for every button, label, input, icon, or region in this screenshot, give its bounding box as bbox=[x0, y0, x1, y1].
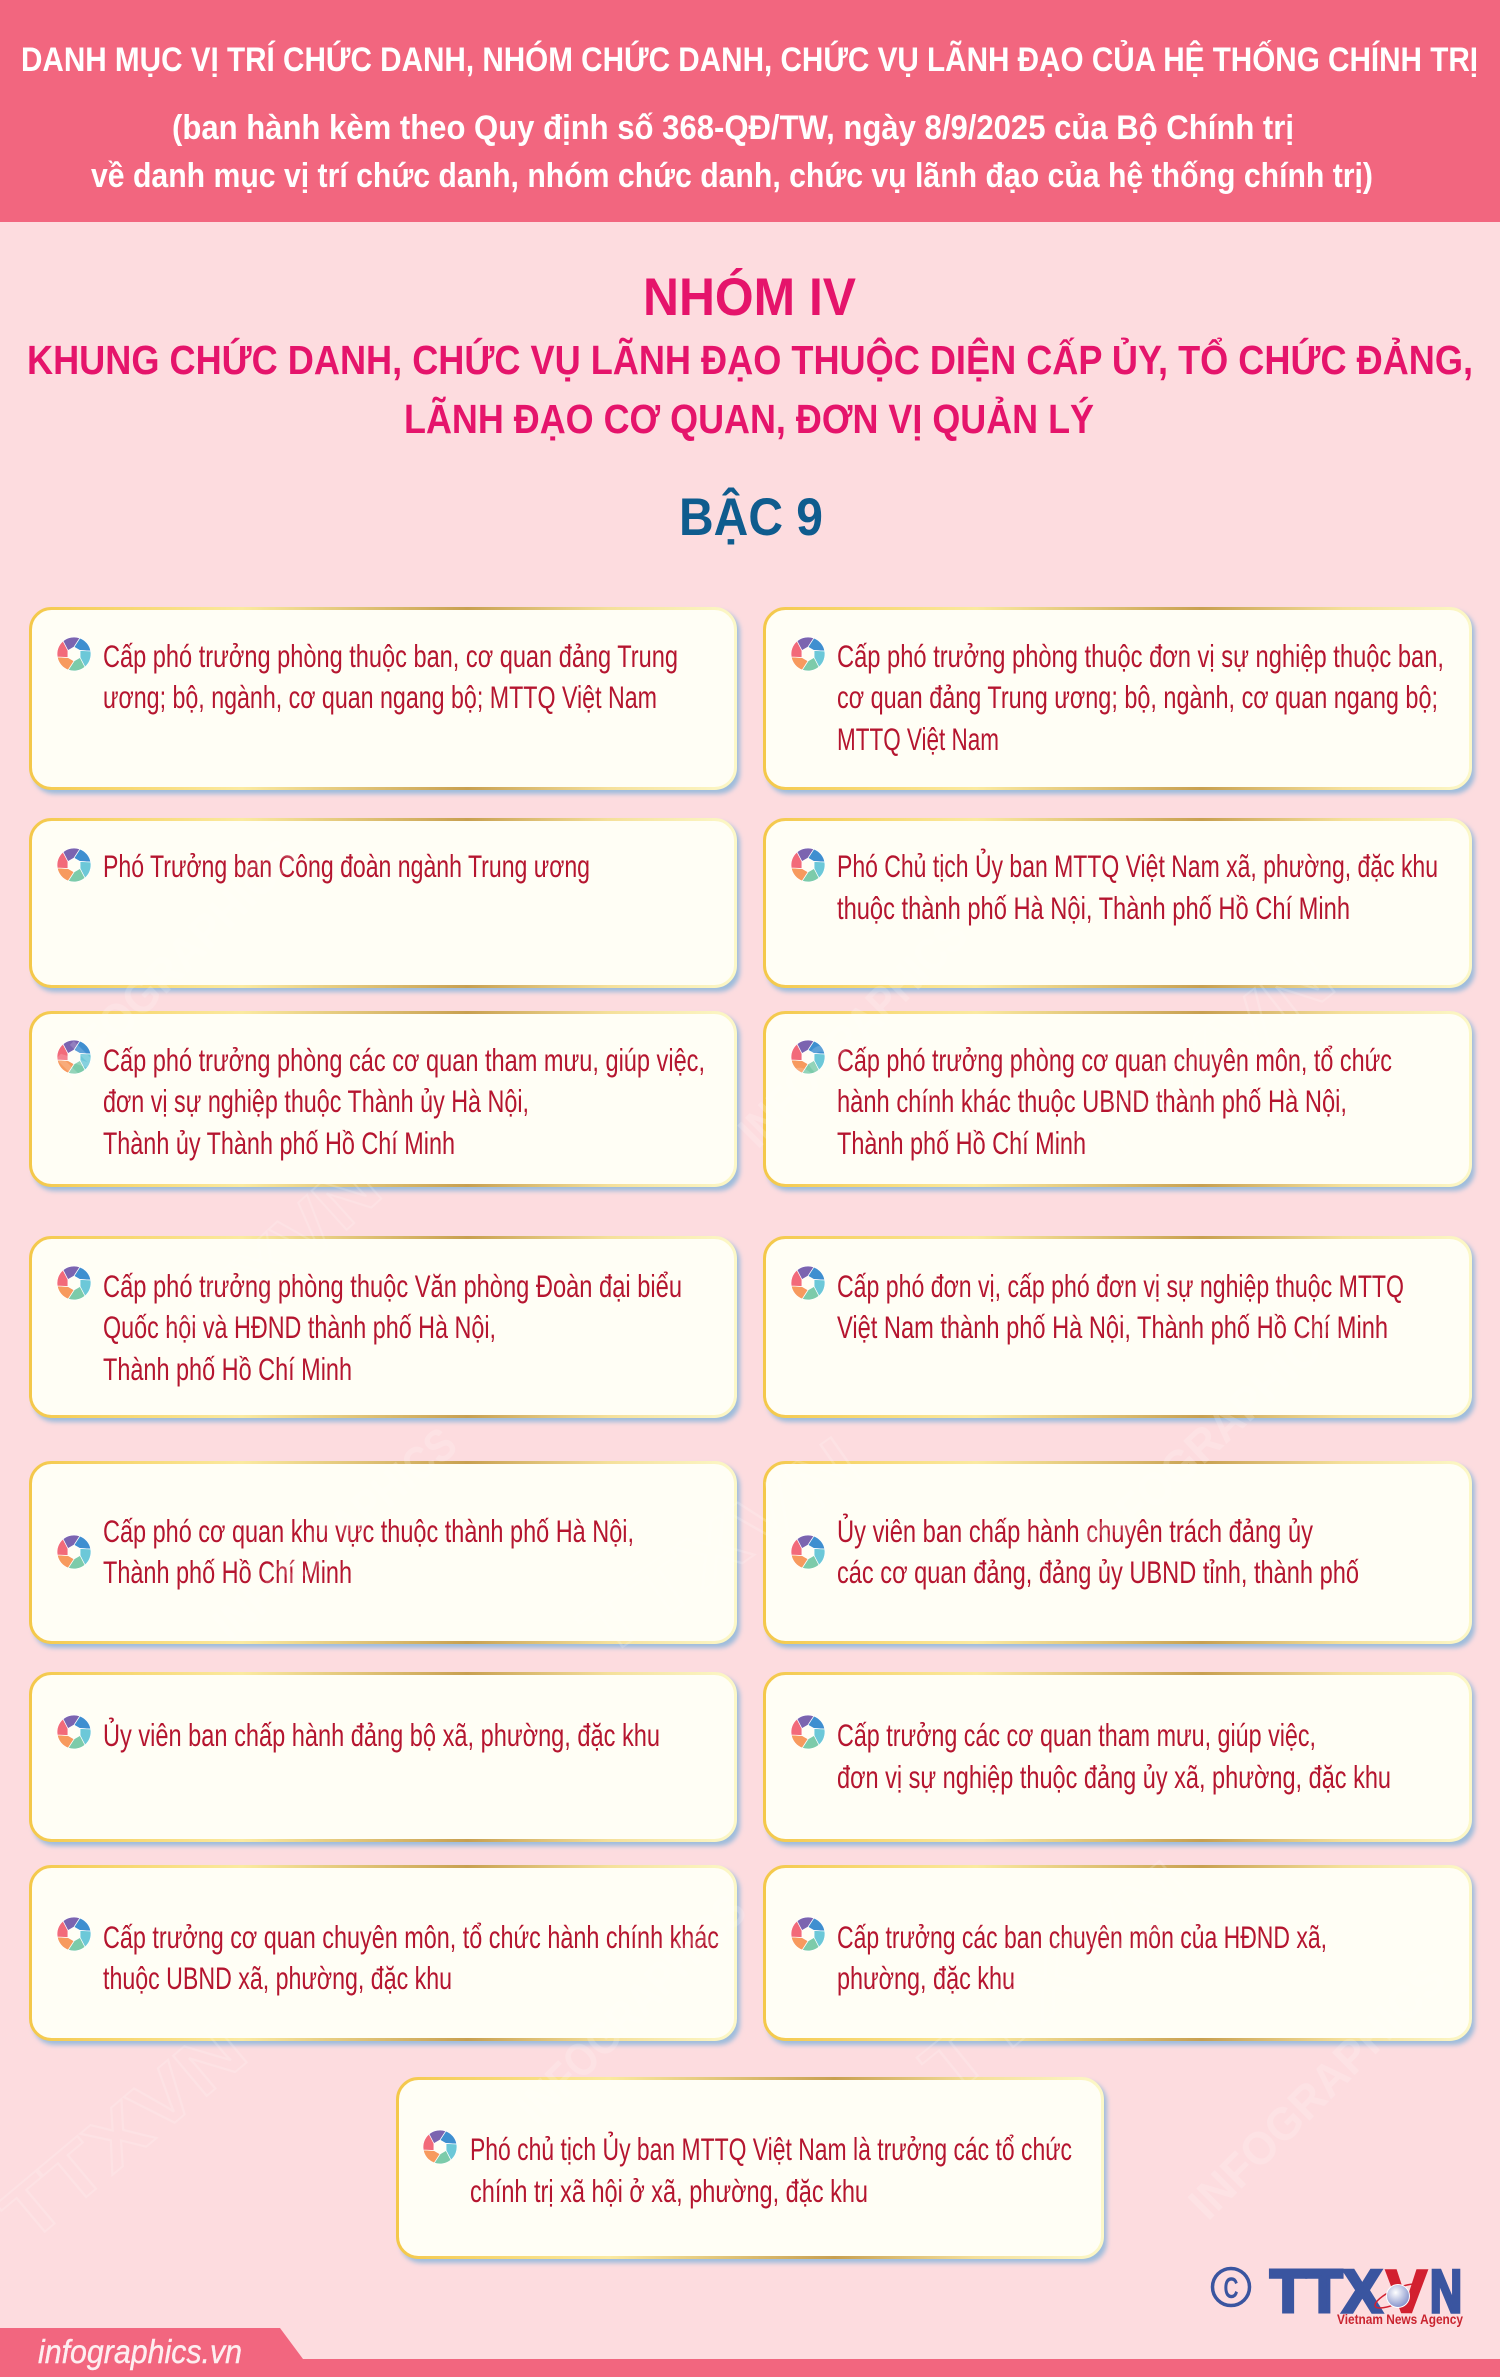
heading: level: BẬC 9 bbox=[679, 486, 823, 547]
icon: copyright: C bbox=[1224, 2272, 1238, 2305]
header band bbox=[0, 0, 1500, 222]
watermark: TTXVN bbox=[565, 1421, 876, 1674]
watermark: INFOGRAPHICS bbox=[203, 1417, 466, 1650]
text: phường, đặc khu bbox=[837, 1960, 1015, 1996]
icon: aperture bbox=[57, 848, 91, 882]
icon: aperture bbox=[791, 848, 825, 882]
text: Cấp phó trưởng phòng thuộc ban, cơ quan đảng Trung bbox=[103, 638, 678, 674]
source label: infographics.vn bbox=[38, 2333, 242, 2370]
footer band bbox=[0, 2328, 1500, 2377]
text bbox=[103, 1513, 634, 1590]
text: Cấp phó trưởng phòng các cơ quan tham mưu, giúp việc, bbox=[103, 1042, 705, 1078]
icon: aperture bbox=[791, 1917, 825, 1951]
panel: row 5 left bbox=[30, 1462, 740, 1648]
document subtitle: về danh mục vị trí chức danh, nhóm chức danh, chức vụ lãnh đạo của hệ thống chính trị) bbox=[91, 157, 1373, 195]
text bbox=[103, 1042, 705, 1161]
watermark: INFOGRAPHICS bbox=[1178, 1952, 1455, 2229]
panel: row 4 right bbox=[764, 1238, 1475, 1422]
icon: aperture bbox=[57, 1040, 91, 1074]
text bbox=[837, 638, 1444, 757]
panel: row 5 right bbox=[764, 1462, 1475, 1648]
text bbox=[103, 638, 678, 715]
heading: framework description bbox=[27, 336, 1473, 442]
heading: framework description: LÃNH ĐẠO CƠ QUAN, ĐƠN VỊ QUẢN LÝ bbox=[404, 396, 1094, 442]
text: Thành ủy Thành phố Hồ Chí Minh bbox=[103, 1125, 455, 1161]
panel: row 2 left bbox=[30, 820, 740, 992]
panel: row 6 left bbox=[30, 1674, 740, 1846]
watermark: INFOGRAPHICS bbox=[38, 829, 308, 1099]
panel: row 2 right bbox=[764, 820, 1475, 992]
text: ương; bộ, ngành, cơ quan ngang bộ; MTTQ Việt Nam bbox=[103, 679, 657, 715]
text: Ủy viên ban chấp hành chuyên trách đảng ủy bbox=[837, 1513, 1313, 1549]
text bbox=[837, 1919, 1327, 1996]
logo: TTXVN: V bbox=[1386, 2258, 1427, 2325]
panel: row 7 right bbox=[764, 1866, 1475, 2045]
text: Phó chủ tịch Ủy ban MTTQ Việt Nam là trưởng các tổ chức bbox=[470, 2131, 1072, 2167]
text bbox=[470, 2131, 1072, 2209]
icon: aperture bbox=[57, 1715, 91, 1749]
icon: aperture bbox=[57, 1266, 91, 1300]
panel: row 8 center bbox=[398, 2078, 1107, 2263]
watermark: INFOGRAPHICS bbox=[728, 908, 977, 1157]
text: MTTQ Việt Nam bbox=[837, 721, 999, 757]
document subtitle: (ban hành kèm theo Quy định số 368-QĐ/TW, ngày 8/9/2025 của Bộ Chính trị bbox=[172, 109, 1294, 147]
text bbox=[103, 1919, 719, 1996]
text: Quốc hội và HĐND thành phố Hà Nội, bbox=[103, 1309, 496, 1345]
panel: row 6 right bbox=[764, 1674, 1475, 1846]
text bbox=[837, 848, 1438, 926]
logo: TTXVN bbox=[1212, 2258, 1463, 2327]
text: Thành phố Hồ Chí Minh bbox=[103, 1554, 352, 1590]
panel: row 3 right bbox=[764, 1012, 1475, 1191]
logo: TTXVN: N bbox=[1430, 2258, 1462, 2325]
heading: group: NHÓM IV bbox=[643, 267, 856, 327]
icon: aperture bbox=[791, 1040, 825, 1074]
watermark: TTXVN bbox=[906, 1845, 1208, 2112]
panel: row 4 left bbox=[30, 1238, 740, 1422]
text bbox=[103, 1268, 682, 1387]
text: Cấp phó cơ quan khu vực thuộc thành phố Hà Nội, bbox=[103, 1513, 634, 1549]
text: thuộc thành phố Hà Nội, Thành phố Hồ Chí Minh bbox=[837, 890, 1350, 926]
text bbox=[837, 1513, 1359, 1590]
text: thuộc UBND xã, phường, đặc khu bbox=[103, 1960, 452, 1996]
text bbox=[837, 1042, 1392, 1161]
icon: aperture bbox=[423, 2130, 457, 2164]
text bbox=[837, 1268, 1404, 1345]
icon: aperture bbox=[791, 637, 825, 671]
watermark: INFOGRAPHICS bbox=[507, 1884, 756, 2133]
icon: aperture bbox=[57, 1917, 91, 1951]
text: Thành phố Hồ Chí Minh bbox=[837, 1125, 1086, 1161]
icon: aperture bbox=[791, 1266, 825, 1300]
watermark: TTXVN bbox=[1061, 935, 1350, 1186]
text: chính trị xã hội ở xã, phường, đặc khu bbox=[470, 2173, 868, 2209]
watermark: TTXVN bbox=[146, 1144, 397, 1382]
watermark bbox=[0, 829, 1455, 2258]
text bbox=[837, 1717, 1391, 1795]
icon: aperture bbox=[791, 1535, 825, 1569]
icon: copyright bbox=[1212, 2268, 1250, 2306]
logo: TTXVN: Vietnam News Agency bbox=[1337, 2312, 1463, 2327]
text: Cấp phó trưởng phòng thuộc Văn phòng Đoàn đại biểu bbox=[103, 1268, 682, 1304]
panel: row 1 right bbox=[764, 608, 1475, 794]
icon: aperture bbox=[57, 637, 91, 671]
icon: aperture bbox=[57, 1535, 91, 1569]
panel: row 7 left bbox=[30, 1866, 740, 2045]
panel: row 1 left bbox=[30, 608, 740, 794]
panel: row 3 left bbox=[30, 1012, 740, 1191]
logo: TTXVN: TTX bbox=[1270, 2258, 1382, 2325]
text: Phó Trưởng ban Công đoàn ngành Trung ương bbox=[103, 848, 590, 884]
document subtitle bbox=[91, 109, 1373, 195]
text: Cấp trưởng các ban chuyên môn của HĐND xã, bbox=[837, 1919, 1327, 1955]
text: Cấp trưởng cơ quan chuyên môn, tổ chức hành chính khác bbox=[103, 1919, 719, 1955]
text: Cấp trưởng các cơ quan tham mưu, giúp việc, bbox=[837, 1717, 1316, 1753]
icon: aperture bbox=[791, 1715, 825, 1749]
text: Ủy viên ban chấp hành đảng bộ xã, phường, đặc khu bbox=[103, 1717, 660, 1753]
text: đơn vị sự nghiệp thuộc Thành ủy Hà Nội, bbox=[103, 1083, 529, 1119]
text: Thành phố Hồ Chí Minh bbox=[103, 1351, 352, 1387]
watermark: INFOGRAPHICS bbox=[1074, 1303, 1351, 1566]
text: hành chính khác thuộc UBND thành phố Hà Nội, bbox=[837, 1083, 1347, 1119]
